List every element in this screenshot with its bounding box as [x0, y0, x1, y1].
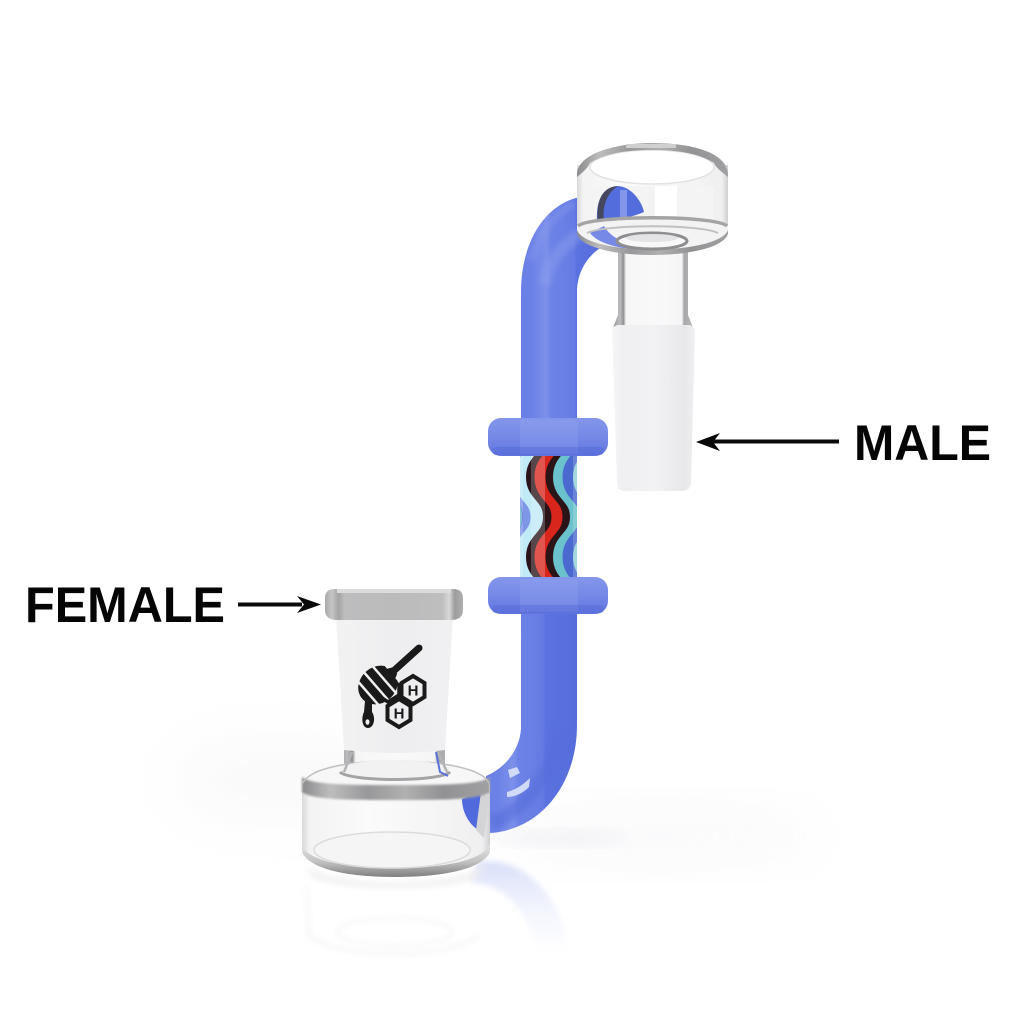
heavy glass base edge — [302, 844, 490, 877]
floor shadow — [170, 745, 820, 851]
female joint: grey cap — [325, 589, 463, 620]
hexagon cell partial — [382, 681, 399, 702]
hexagon cell upper: H — [408, 682, 418, 700]
dipper head — [358, 666, 398, 704]
glossy highlights on lower bend — [507, 767, 530, 797]
hexagon cell lower: H — [394, 706, 404, 722]
logo: honey dipper with hexagons — [348, 648, 424, 728]
inner floor of top bowl — [590, 150, 714, 184]
blue window in top bowl — [597, 186, 644, 222]
dipper handle — [388, 648, 419, 676]
top glass bowl — [577, 143, 728, 255]
arrow: pointing to female joint — [238, 596, 321, 613]
arrow: pointing to male joint — [696, 433, 839, 451]
label: female: FEMALE — [25, 577, 225, 633]
top rim of bottom bowl — [302, 760, 490, 799]
lower blue flange — [488, 577, 608, 614]
reflection of base on floor — [306, 861, 570, 955]
tube: lower blue bend — [486, 610, 577, 833]
neck foot ring — [340, 760, 450, 780]
bottom glass bowl — [302, 752, 490, 877]
decorated wave section — [520, 456, 577, 577]
female joint: frosted body — [336, 616, 453, 753]
inner floor of bottom bowl — [314, 832, 470, 868]
upper blue flange — [488, 418, 608, 456]
dripping honey — [362, 701, 374, 728]
blue refraction in bottom bowl — [462, 791, 481, 830]
infographic canvas — [28, 143, 990, 922]
label: male: MALE — [854, 415, 991, 471]
female joint: clear lower neck — [336, 748, 452, 783]
lower ring of top bowl — [577, 217, 728, 252]
male joint: frosted taper — [612, 325, 695, 491]
tube: upper blue bend — [521, 197, 606, 420]
male joint: clear neck — [612, 236, 694, 330]
top rim of bowl — [577, 143, 728, 177]
